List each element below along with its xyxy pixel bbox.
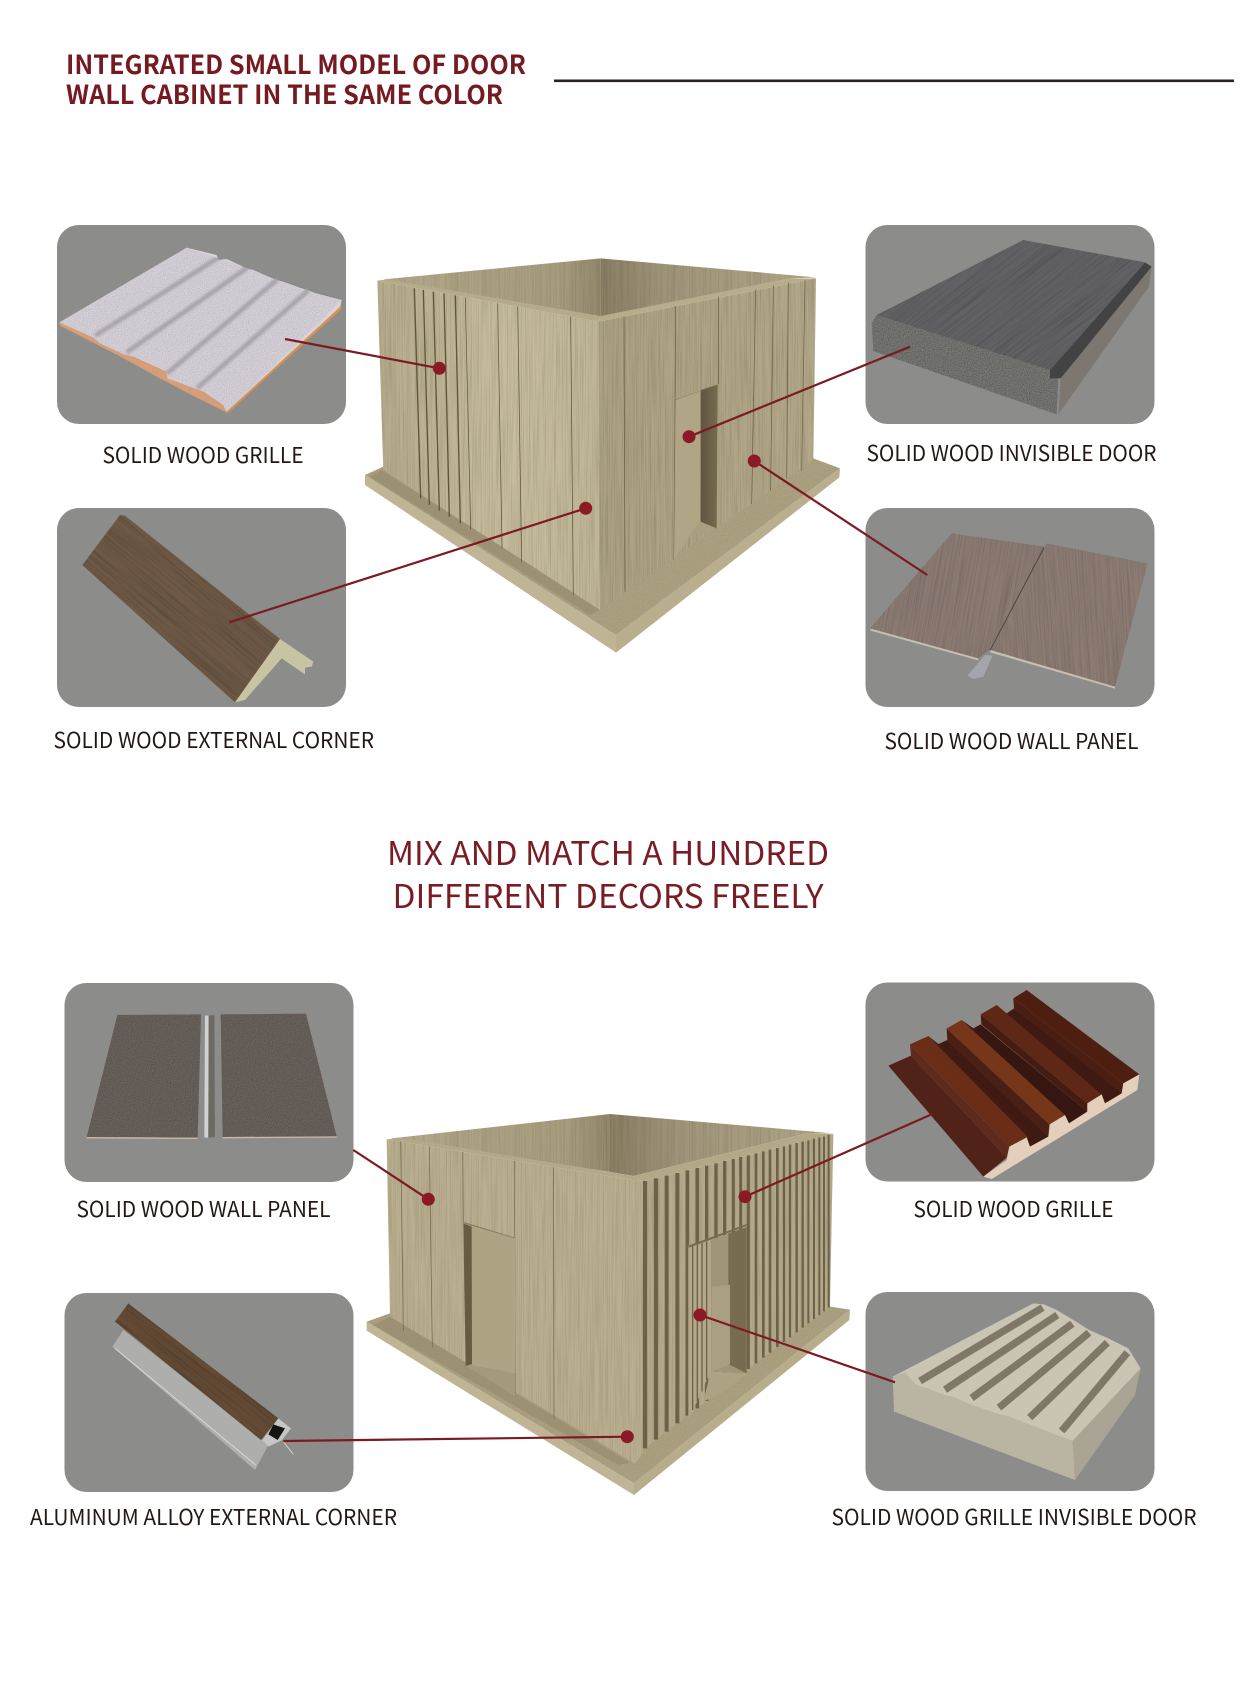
grille header band [686,1224,747,1247]
product: walnut grille [888,990,1139,1179]
callout: wall panel to wall [748,454,927,575]
base board [365,458,840,653]
panel: solid wood grille (white) [57,225,346,424]
label: solid wood grille: SOLID WOOD GRILLE [102,438,304,470]
label: aluminum alloy external corner: ALUMINUM ALLOY EXTERNAL CORNER [30,1500,397,1532]
callout: grille lower [738,1114,932,1203]
panel: solid wood grille invisible door [866,1292,1154,1491]
door opening [463,1223,472,1366]
cabinet model 1 [365,258,840,653]
callout: wall panel lower [353,1150,435,1206]
callout: external corner to wall [229,502,592,622]
product: cream grille block [893,1303,1141,1480]
door opening [701,384,718,528]
right wall with door [598,278,816,610]
title: mix and match: MIX AND MATCH A HUNDRED [387,827,829,875]
label: solid wood external corner: SOLID WOOD EXTERNAL CORNER [54,723,374,755]
panel: aluminum alloy external corner [64,1293,354,1492]
interior back walls [392,1114,833,1176]
product: aluminum corner [112,1304,294,1470]
base board [367,1307,850,1495]
title: mix and match: DIFFERENT DECORS FREELY [392,870,824,918]
title: mix and match [387,827,829,918]
title: integrated small model [66,45,526,112]
left wall [387,1138,643,1463]
title: integrated small model: WALL CABINET IN THE SAME COLOR [66,75,503,112]
door leaf [472,1227,516,1373]
interior back walls [383,258,816,317]
left wall [377,279,601,610]
panel: solid wood wall panel [866,508,1154,707]
label: solid wood invisible door: SOLID WOOD INVISIBLE DOOR [866,436,1157,468]
panel: solid wood grille (walnut) [866,982,1154,1182]
grille door leaf [688,1240,747,1418]
right grille wall [633,1133,833,1450]
label: solid wood grille lower: SOLID WOOD GRILLE [914,1192,1114,1224]
door leaf [674,390,701,560]
label: solid wood wall panel lower: SOLID WOOD WALL PANEL [76,1192,331,1224]
product: grey-brown boards [870,534,1148,688]
label: solid wood wall panel: SOLID WOOD WALL PANEL [884,724,1139,756]
panel: solid wood external corner [57,508,346,707]
callout: grille to wall [285,339,446,375]
panel: solid wood invisible door [866,225,1154,424]
panel: solid wood wall panel (dark) [64,983,354,1182]
grille door opening [710,1227,747,1373]
label: solid wood grille invisible door: SOLID WOOD GRILLE INVISIBLE DOOR [832,1500,1197,1532]
product: white grille [59,248,342,412]
product: grey door block [872,240,1152,414]
callout: grille invisible door lower [694,1308,895,1382]
product: external corner [82,515,314,702]
product: dark boards with strip [87,1014,337,1139]
cabinet model 2 [367,1114,850,1495]
callout: invisible door to wall [682,347,910,443]
title: integrated small model: INTEGRATED SMALL MODEL OF DOOR [66,45,526,82]
callout: aluminum corner lower [283,1430,634,1443]
